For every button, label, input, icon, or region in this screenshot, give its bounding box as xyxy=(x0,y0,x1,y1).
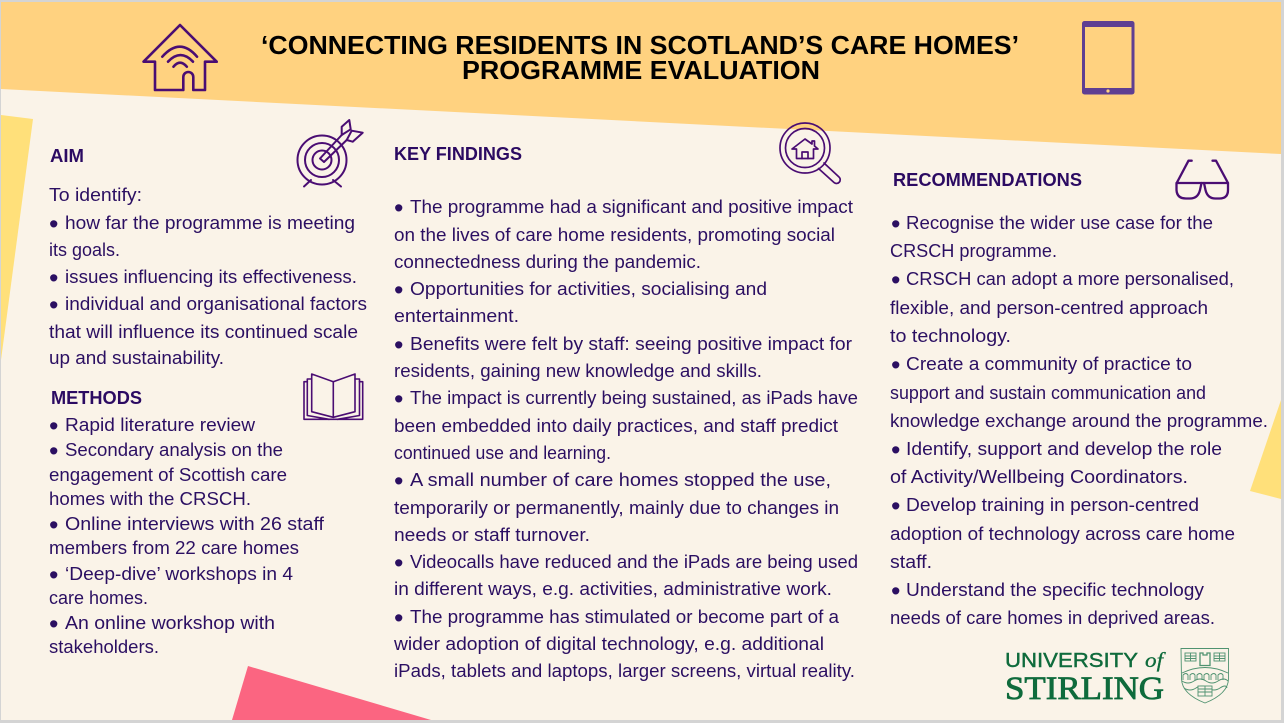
text block: methods xyxy=(49,411,325,657)
text block: aim: up and sustainability. xyxy=(49,347,224,368)
text block: recommendations: Create a community of practice to xyxy=(906,353,1192,374)
text block: key findings: connectedness during the pandemic. xyxy=(394,251,701,272)
text block: key findings: A small number of care homes stopped the use, xyxy=(410,469,831,490)
logo wordmark: of xyxy=(1145,648,1166,672)
logo crest xyxy=(1181,648,1228,703)
heading: key findings: KEY FINDINGS xyxy=(394,144,522,164)
text block: recommendations: support and sustain communication and xyxy=(890,382,1206,403)
text block: recommendations: flexible, and person-centred approach xyxy=(890,297,1208,318)
text block: recommendations: • xyxy=(891,435,900,465)
text block: key findings: • xyxy=(394,603,403,633)
text block: key findings: been embedded into daily practices, and staff predict xyxy=(394,415,838,436)
panel: methods xyxy=(49,374,363,657)
heading: methods: METHODS xyxy=(51,388,142,408)
text block: methods: ‘Deep-dive’ workshops in 4 xyxy=(65,563,293,584)
text block: key findings: The programme had a significant and positive impact xyxy=(410,196,853,217)
text block: aim xyxy=(49,184,367,368)
text block: aim: • xyxy=(49,290,58,320)
text block: methods: stakeholders. xyxy=(49,636,159,657)
text block: key findings: entertainment. xyxy=(394,305,519,326)
text block: recommendations: • xyxy=(891,576,900,606)
text block: recommendations: knowledge exchange around the programme. xyxy=(890,410,1268,431)
text block: recommendations: • xyxy=(891,209,900,239)
logo wordmark xyxy=(1005,648,1166,707)
text block: recommendations: Recognise the wider use case for the xyxy=(906,212,1213,233)
text block: recommendations: needs of care homes in deprived areas. xyxy=(890,607,1215,628)
heading: recommendations: RECOMMENDATIONS xyxy=(893,170,1082,190)
text block: key findings: residents, gaining new knowledge and skills. xyxy=(394,360,762,381)
text block: key findings: on the lives of care home residents, promoting social xyxy=(394,224,835,245)
heading: aim: AIM xyxy=(50,146,84,166)
text block: methods: • xyxy=(49,560,58,590)
text block: recommendations: to technology. xyxy=(890,325,1011,346)
text block: recommendations: Understand the specific technology xyxy=(906,579,1205,600)
text block: aim: how far the programme is meeting xyxy=(65,212,355,233)
text block: key findings: • xyxy=(394,275,403,305)
text block: recommendations: Develop training in person-centred xyxy=(906,494,1199,515)
text block: key findings: Benefits were felt by staff: seeing positive impact for xyxy=(410,333,852,354)
text block: key findings: wider adoption of digital technology, e.g. additional xyxy=(393,633,824,654)
text block: key findings: • xyxy=(394,548,403,578)
text block: recommendations: staff. xyxy=(890,551,932,572)
logo wordmark: UNIVERSITY xyxy=(1005,650,1138,672)
icon: tablet xyxy=(1082,21,1134,94)
text block: recommendations: • xyxy=(891,491,900,521)
text block: key findings: needs or staff turnover. xyxy=(394,524,590,545)
icon: glasses xyxy=(1176,161,1228,198)
text block: aim: To identify: xyxy=(49,184,142,205)
text block: aim: that will influence its continued scale xyxy=(49,321,358,342)
text block: key findings: Videocalls have reduced and the iPads are being used xyxy=(410,551,858,572)
right yellow accent xyxy=(1250,400,1281,499)
text block: recommendations xyxy=(890,209,1268,628)
title: PROGRAMME EVALUATION xyxy=(462,55,820,85)
panel: aim xyxy=(49,120,367,368)
text block: key findings: • xyxy=(394,193,403,223)
header band xyxy=(1,2,1281,154)
text block: aim: • xyxy=(49,209,58,239)
text block: key findings: Opportunities for activities, socialising and xyxy=(410,278,767,299)
text block: methods: Secondary analysis on the xyxy=(65,439,283,460)
left yellow accent xyxy=(1,115,33,360)
text block: aim: • xyxy=(49,263,58,293)
text block: recommendations: CRSCH programme. xyxy=(890,240,1057,261)
text block: methods: • xyxy=(49,510,58,540)
text block: methods: Online interviews with 26 staff xyxy=(65,513,325,534)
text block: methods: • xyxy=(49,609,58,639)
text block: methods: An online workshop with xyxy=(65,612,275,633)
title: ‘CONNECTING RESIDENTS IN SCOTLAND’S CARE HOMES’ xyxy=(261,30,1019,60)
text block: key findings xyxy=(393,193,858,681)
pink accent xyxy=(232,666,431,720)
text block: methods: engagement of Scottish care xyxy=(49,464,287,485)
text block: aim: individual and organisational factors xyxy=(65,293,367,314)
icon: open book xyxy=(304,374,363,419)
text block: key findings: iPads, tablets and laptops, larger screens, virtual reality. xyxy=(394,660,855,681)
logo: university of stirling xyxy=(1005,648,1228,707)
title xyxy=(261,30,1019,85)
text block: key findings: continued use and learning. xyxy=(394,442,611,463)
text block: aim: its goals. xyxy=(49,239,120,260)
panel: key findings xyxy=(393,123,858,681)
text block: key findings: The impact is currently being sustained, as iPads have xyxy=(410,387,858,408)
text block: recommendations: Identify, support and develop the role xyxy=(906,438,1222,459)
text block: methods: members from 22 care homes xyxy=(49,537,299,558)
text block: key findings: • xyxy=(394,466,403,496)
text block: methods: • xyxy=(49,436,58,466)
text block: aim: issues influencing its effectiveness. xyxy=(65,266,357,287)
text block: methods: Rapid literature review xyxy=(65,414,256,435)
text block: recommendations: • xyxy=(891,265,900,295)
text block: methods: care homes. xyxy=(49,587,148,608)
text block: methods: homes with the CRSCH. xyxy=(49,488,251,509)
icon: magnifier with house xyxy=(780,123,840,183)
text block: key findings: The programme has stimulated or become part of a xyxy=(410,606,840,627)
text block: recommendations: of Activity/Wellbeing Coordinators. xyxy=(890,466,1188,487)
icon: target with arrow xyxy=(298,120,363,186)
text block: key findings: • xyxy=(394,384,403,414)
text block: key findings: • xyxy=(394,330,403,360)
text block: key findings: temporarily or permanently, mainly due to changes in xyxy=(394,497,839,518)
text block: recommendations: CRSCH can adopt a more personalised, xyxy=(906,268,1234,289)
logo wordmark: STIRLING xyxy=(1005,671,1164,707)
text block: methods: • xyxy=(49,411,58,441)
text block: key findings: in different ways, e.g. activities, administrative work. xyxy=(394,578,832,599)
panel: recommendations xyxy=(890,161,1268,628)
text block: recommendations: adoption of technology across care home xyxy=(890,523,1235,544)
text block: recommendations: • xyxy=(891,350,900,380)
icon: house with wifi xyxy=(144,25,217,90)
